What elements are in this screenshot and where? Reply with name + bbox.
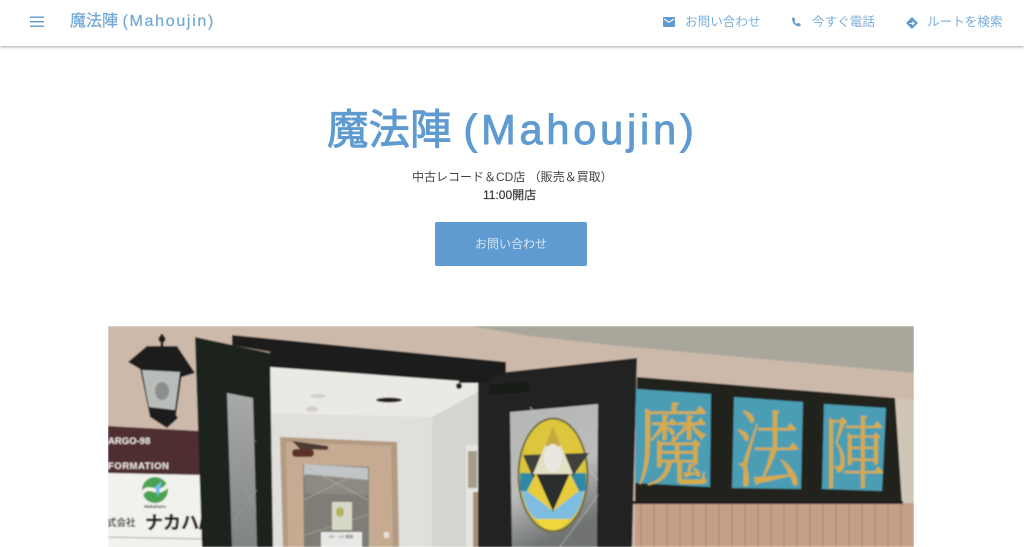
contact button: お問い合わせ [475, 237, 547, 251]
window pane with 法: 法 [735, 383, 803, 505]
interior door and glass [280, 437, 399, 547]
window frames [635, 377, 902, 503]
contact link: お問い合わせ [685, 15, 761, 29]
contact button [435, 222, 587, 266]
navigation header bar [0, 0, 1024, 46]
information sign [107, 426, 205, 547]
door closer header [232, 335, 506, 383]
brick wall [632, 501, 914, 547]
icon: phone [792, 18, 801, 26]
storefront photo [108, 326, 914, 547]
window pane with 魔: 魔 [637, 375, 709, 504]
magic circle emblem [518, 418, 589, 532]
route link: ルートを検索 [927, 15, 1003, 29]
main title: 魔法陣 (Mahoujin) [327, 106, 698, 153]
opening hours: 11:00開店 [483, 188, 536, 202]
interior door and glass: CD ・LP 買取 [329, 534, 353, 539]
information sign: 式会社 [107, 517, 136, 529]
call link: 今すぐ電話 [812, 15, 875, 29]
window pane with 陣: 陣 [824, 391, 885, 506]
site name: 魔法陣 (Mahoujin) [70, 13, 215, 30]
wall lamp [128, 334, 195, 428]
information sign: ARGO-98 [108, 436, 150, 447]
right door leaf [456, 358, 637, 547]
doorway interior [270, 360, 480, 547]
icon: mail [663, 17, 675, 27]
icon: directions diamond [906, 17, 918, 29]
left door leaf [195, 337, 273, 547]
icon: hamburger menu [30, 16, 44, 27]
information sign: FORMATION [108, 461, 169, 472]
logo: Nakaharu: Nakaharu [144, 504, 166, 510]
wall and ceiling [108, 326, 914, 547]
subtitle: shop description: 中古レコード＆CD店 （販売＆買取） [412, 170, 613, 184]
information sign: ナカハ/ [145, 513, 204, 533]
